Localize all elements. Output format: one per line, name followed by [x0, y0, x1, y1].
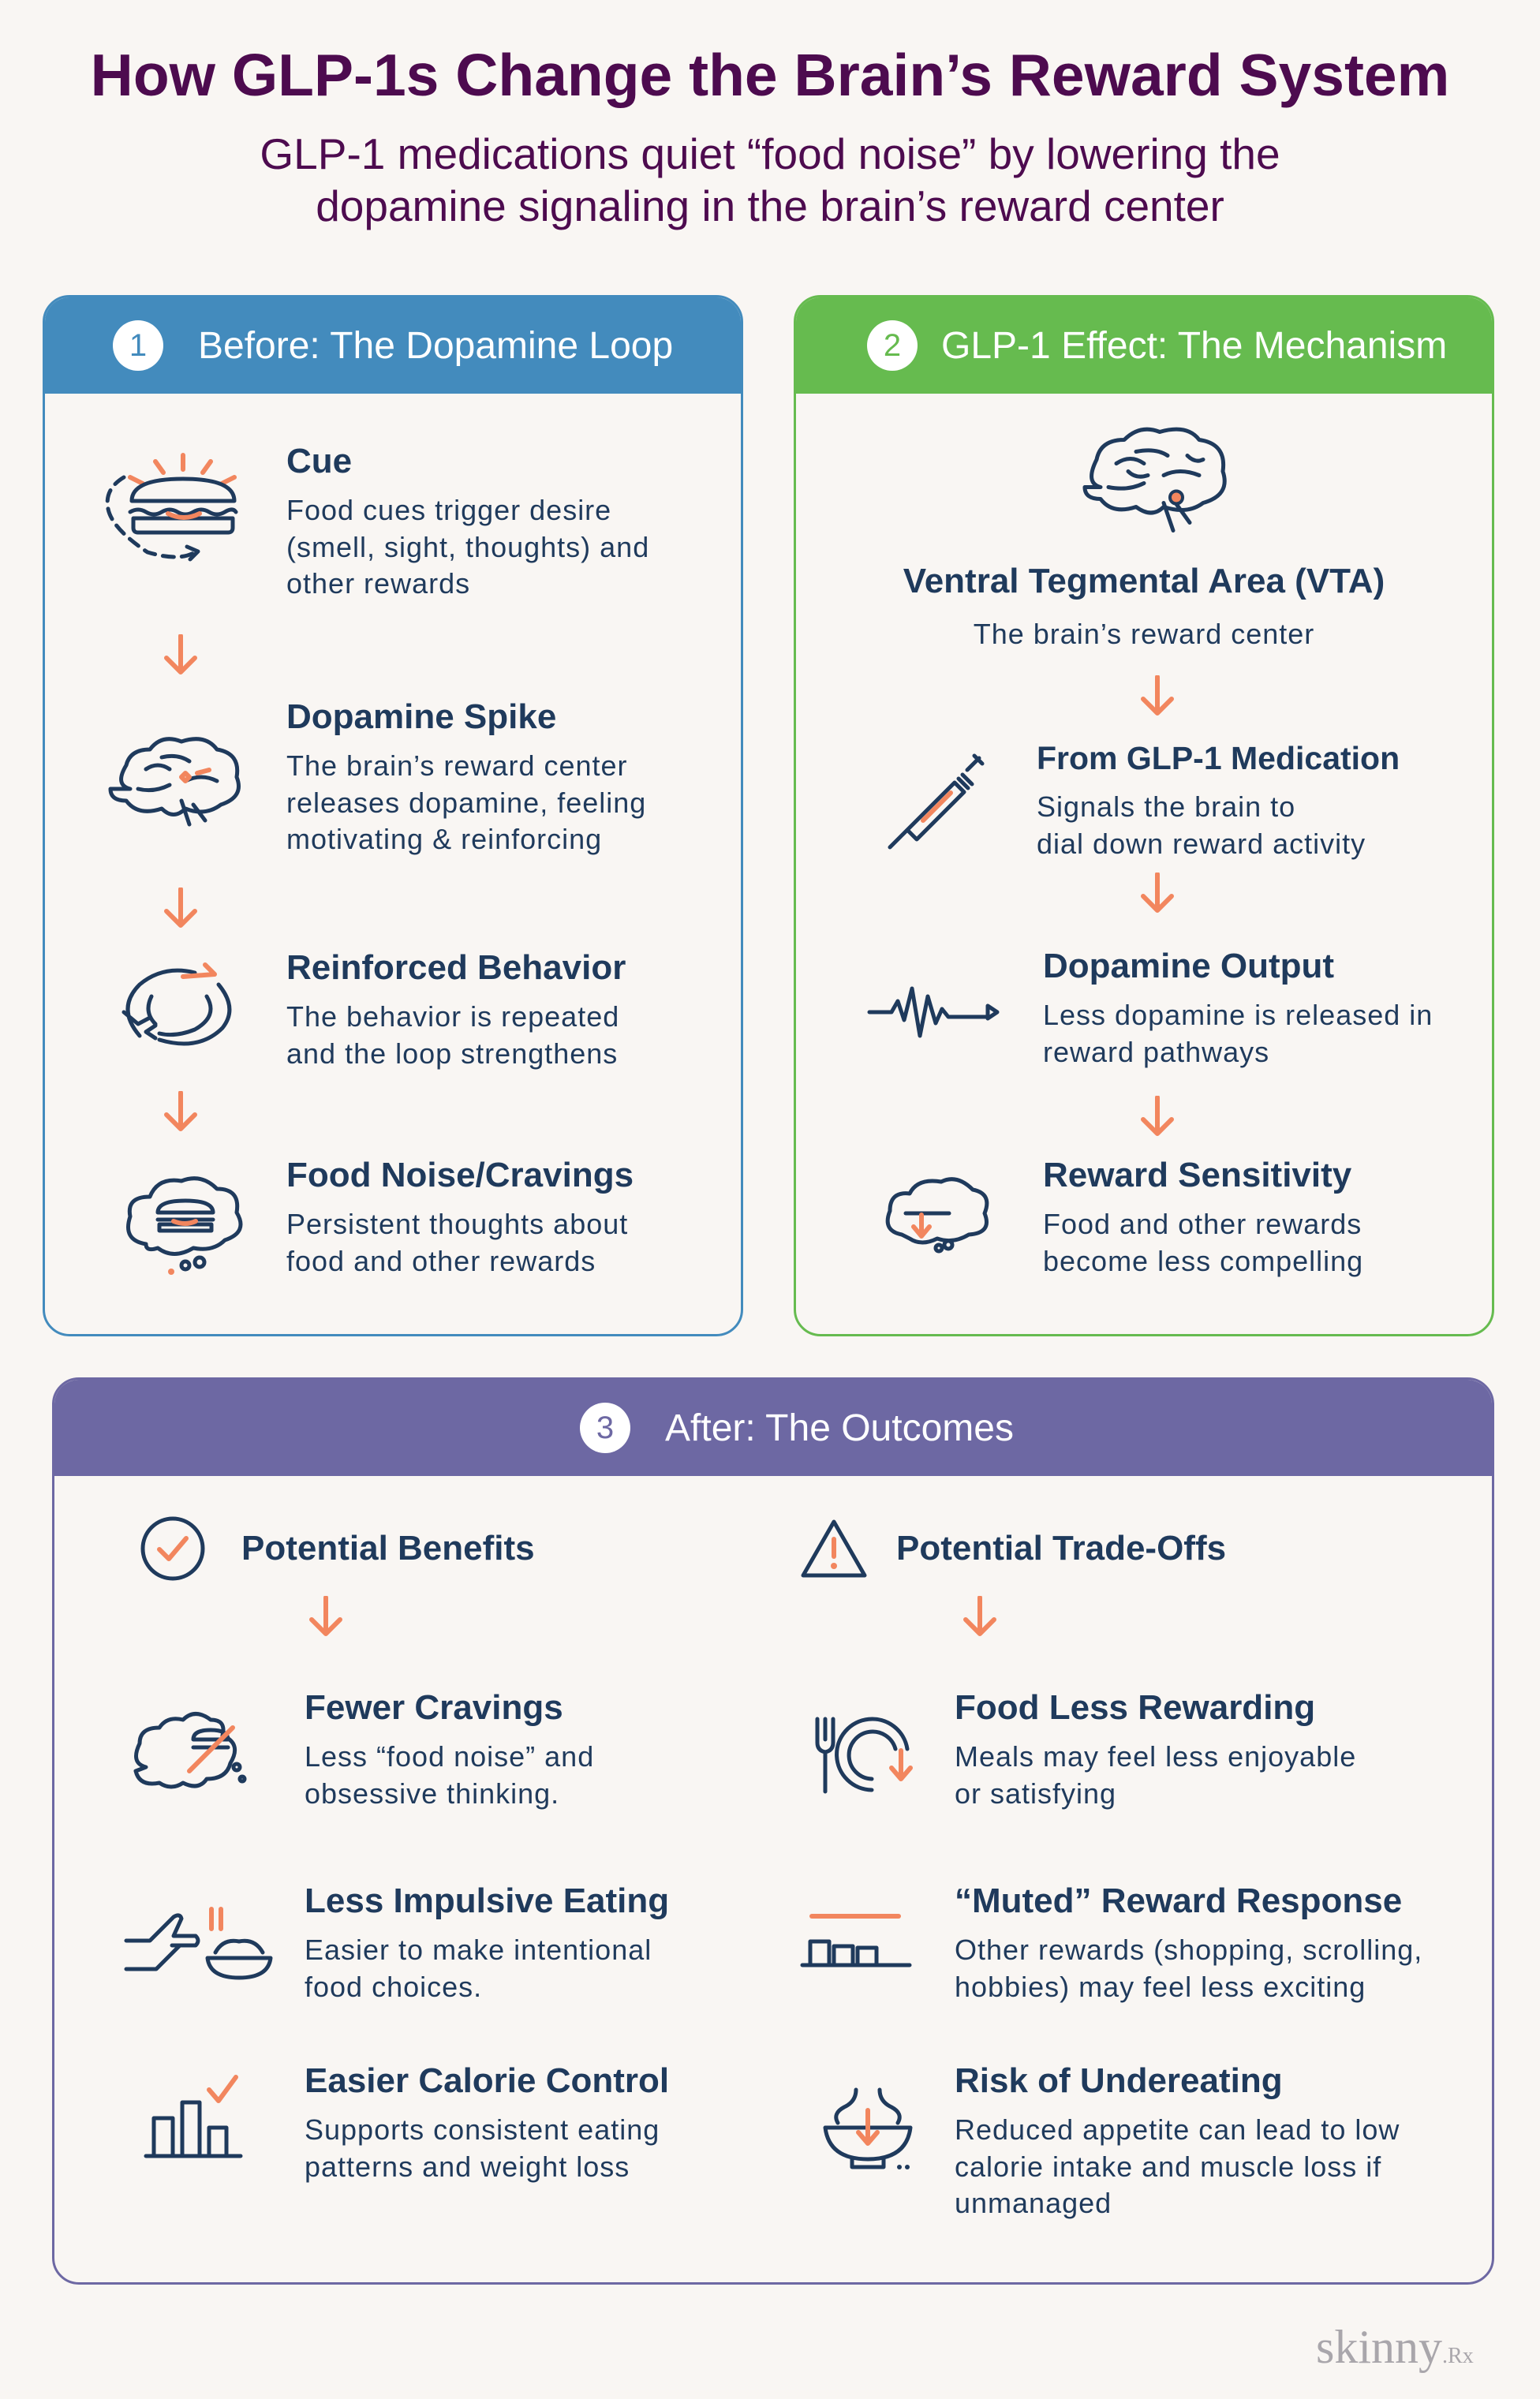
title: How GLP-1s Change the Brain’s Reward System	[91, 42, 1449, 108]
item: reward sensitivity: Food and other rewards	[1043, 1208, 1362, 1240]
header: mechanism: GLP-1 Effect: The Mechanism	[941, 325, 1447, 366]
header: outcomes	[54, 1380, 1492, 1476]
icon: brain crossed burger	[133, 1712, 246, 1789]
icon: muted bars	[800, 1914, 912, 1967]
heading: potential benefits: Potential Benefits	[241, 1529, 535, 1568]
arrow 5	[1141, 873, 1174, 913]
text: reward center: The brain’s reward center	[974, 618, 1314, 650]
icon: loop	[121, 962, 232, 1046]
item: reward sensitivity: Reward Sensitivity	[1043, 1156, 1351, 1194]
item: dopamine spike: Dopamine Spike	[286, 697, 556, 736]
header: before	[45, 297, 741, 394]
item: easier calorie control: patterns and weight loss	[305, 2151, 630, 2182]
header: outcomes: 3	[596, 1411, 614, 1445]
item: from GLP-1: From GLP-1 Medication	[1037, 740, 1400, 776]
item: cue: other rewards	[286, 567, 470, 600]
item: risk of undereating: unmanaged	[955, 2187, 1112, 2219]
panel: GLP-1 mechanism	[794, 295, 1494, 1336]
item: less impulsive eating: food choices.	[305, 1971, 482, 2002]
item: reinforced behavior: The behavior is repeated	[286, 1000, 619, 1033]
arrow 1	[164, 634, 197, 674]
icon: thought cloud burger	[126, 1176, 243, 1275]
icon: warning triangle	[802, 1519, 866, 1578]
item: reinforced behavior: and the loop strengthens	[286, 1037, 618, 1070]
item: food less rewarding	[955, 1688, 1356, 1810]
arrow 3	[164, 1091, 197, 1131]
header: outcomes: After: The Outcomes	[665, 1407, 1014, 1448]
item: food noise: Persistent thoughts about	[286, 1208, 628, 1240]
item: reward sensitivity	[1043, 1156, 1363, 1276]
subtitle: GLP-1 medications quiet “food noise” by lowering the	[260, 129, 1280, 178]
item: cue: Cue	[286, 442, 352, 480]
item: dopamine spike: motivating & reinforcing	[286, 823, 602, 855]
item: dopamine output	[1043, 947, 1433, 1068]
arrow 4	[1141, 675, 1174, 716]
item: fewer cravings: Fewer Cravings	[305, 1688, 563, 1727]
item: from GLP-1	[1037, 740, 1400, 860]
item: dopamine output: Dopamine Output	[1043, 947, 1334, 985]
item: food noise	[286, 1156, 634, 1276]
item: cue: Food cues trigger desire	[286, 494, 611, 526]
item: from GLP-1: Signals the brain to	[1037, 790, 1295, 823]
item: food noise: Food Noise/Cravings	[286, 1156, 634, 1194]
item: fewer cravings: Less “food noise” and	[305, 1740, 594, 1773]
panel: before dopamine loop	[43, 295, 743, 1336]
item: less impulsive eating: Easier to make intentional	[305, 1934, 652, 1966]
item: muted reward response: Other rewards (shopping, scrolling,	[955, 1934, 1422, 1966]
item: muted reward response: “Muted” Reward Response	[955, 1881, 1402, 1920]
item: cue	[286, 442, 649, 600]
item: from GLP-1: dial down reward activity	[1037, 827, 1366, 860]
header: mechanism	[796, 297, 1492, 394]
arrow 8	[963, 1596, 996, 1636]
icon: brain VTA	[1082, 428, 1227, 532]
item: easier calorie control: Easier Calorie Control	[305, 2061, 669, 2100]
item: risk of undereating	[955, 2061, 1400, 2219]
item: fewer cravings: obsessive thinking.	[305, 1777, 559, 1810]
item: risk of undereating: Risk of Undereating	[955, 2061, 1283, 2100]
subtitle: dopamine signaling in the brain’s reward center	[316, 181, 1224, 230]
item: reward sensitivity: become less compelling	[1043, 1245, 1363, 1276]
item: food noise: food and other rewards	[286, 1245, 596, 1276]
logo: skinny rx: skinny.Rx	[1316, 2321, 1474, 2373]
item: less impulsive eating: Less Impulsive Eating	[305, 1881, 669, 1920]
item: reinforced behavior: Reinforced Behavior	[286, 948, 626, 987]
item: food less rewarding: Food Less Rewarding	[955, 1688, 1315, 1727]
icon: wave	[868, 986, 999, 1038]
item: dopamine output: Less dopamine is released in	[1043, 999, 1433, 1031]
panel: after outcomes	[52, 1377, 1494, 2285]
arrow 7	[309, 1596, 342, 1636]
header: mechanism: 2	[884, 328, 901, 363]
item: muted reward response	[955, 1881, 1422, 2002]
arrow 6	[1141, 1096, 1174, 1136]
item: food less rewarding: or satisfying	[955, 1777, 1116, 1810]
item: easier calorie control	[305, 2061, 669, 2182]
item: cue: (smell, sight, thoughts) and	[286, 530, 649, 563]
item: easier calorie control: Supports consistent eating	[305, 2113, 660, 2146]
item: dopamine output: reward pathways	[1043, 1035, 1269, 1068]
item: fewer cravings	[305, 1688, 594, 1810]
icon: burger cue	[106, 453, 238, 562]
icon: check circle	[140, 1516, 205, 1581]
icon: brain spike	[109, 737, 241, 827]
icon: bar chart check	[144, 2075, 243, 2158]
heading: VTA: Ventral Tegmental Area (VTA)	[903, 562, 1385, 600]
item: food less rewarding: Meals may feel less enjoyable	[955, 1740, 1356, 1773]
icon: low reward cloud	[885, 1177, 989, 1253]
item: risk of undereating: calorie intake and muscle loss if	[955, 2151, 1381, 2182]
item: muted reward response: hobbies) may feel less exciting	[955, 1971, 1366, 2002]
subtitle	[260, 129, 1280, 230]
header: before: Before: The Dopamine Loop	[198, 325, 673, 366]
icon: fork and plate	[816, 1717, 913, 1794]
header: before: 1	[129, 328, 147, 363]
icon: bowl down	[824, 2087, 912, 2169]
icon: syringe	[888, 754, 985, 849]
item: dopamine spike	[286, 697, 646, 855]
item: dopamine spike: releases dopamine, feeling	[286, 786, 646, 819]
heading: potential trade-offs: Potential Trade-Offs	[896, 1529, 1226, 1568]
item: reinforced behavior	[286, 948, 626, 1070]
item: less impulsive eating	[305, 1881, 669, 2002]
item: dopamine spike: The brain’s reward center	[286, 749, 628, 782]
item: risk of undereating: Reduced appetite can lead to low	[955, 2113, 1400, 2146]
icon: hand and bowl	[125, 1907, 273, 1980]
arrow 2	[164, 887, 197, 928]
